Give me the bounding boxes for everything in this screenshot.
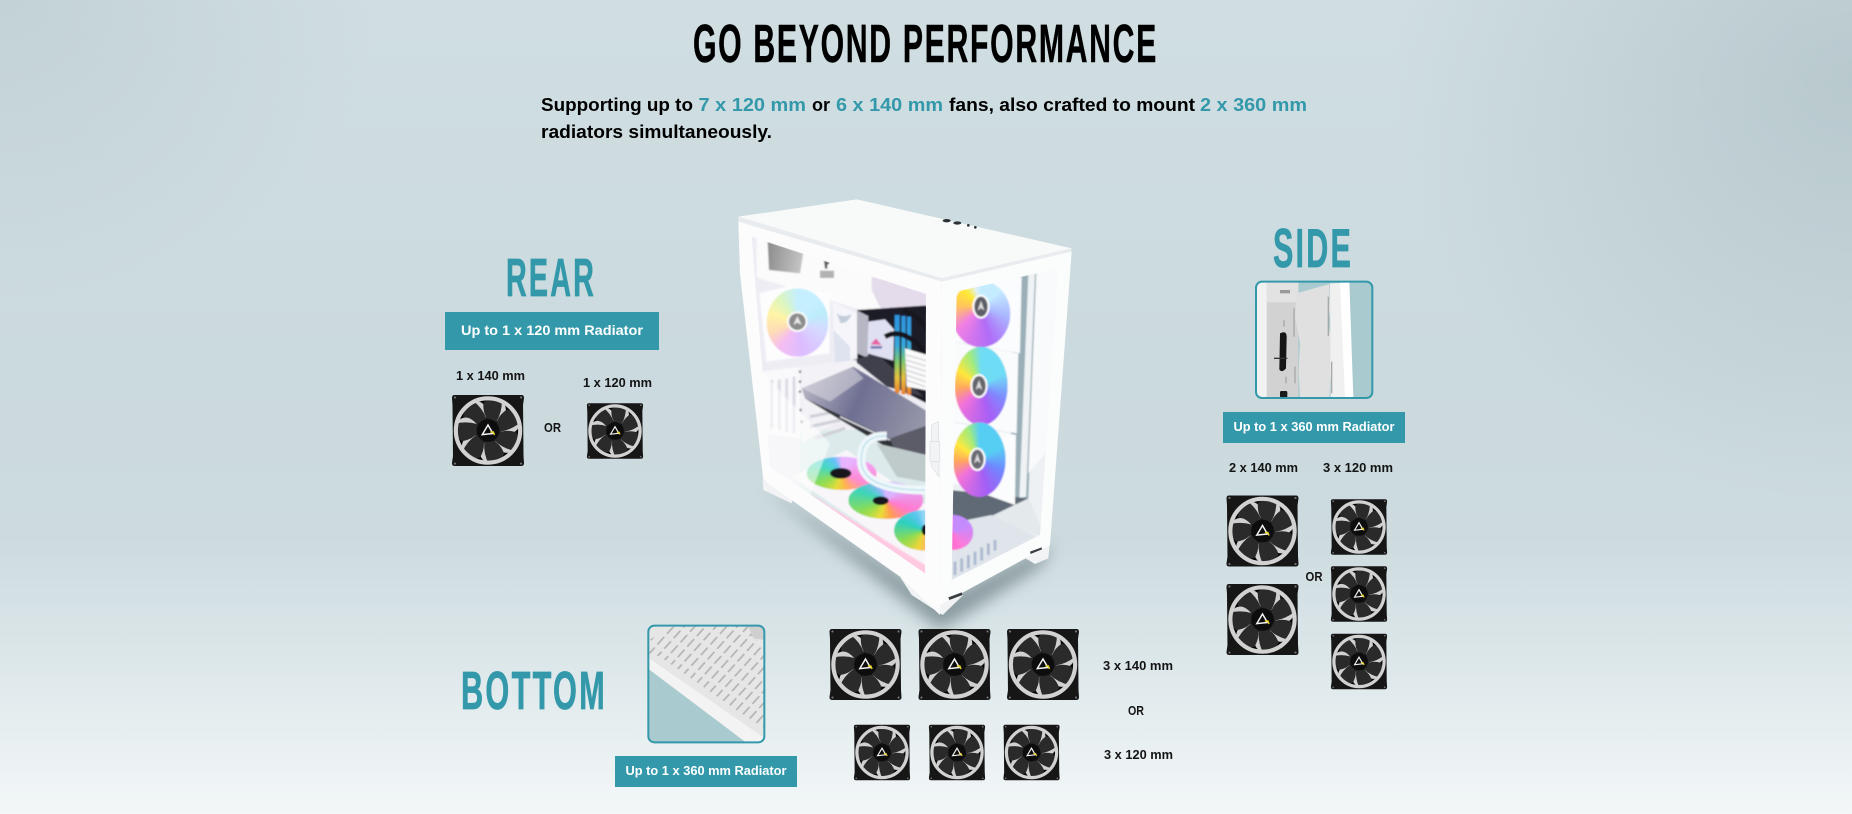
label: or: OR [1306,570,1322,584]
heading: side: SIDE [1273,217,1353,279]
intro text: 2 x 360 mm [1200,94,1307,115]
icon: 120 mm fan [926,723,985,782]
label: 3 x 120 mm: 3 x 120 mm [1323,461,1393,475]
photo: side panel closeup [1255,280,1375,400]
intro text [541,94,1307,142]
radiator badge: rear: Up to 1 x 120 mm Radiator [461,322,644,338]
icon: 120 mm fan [1328,632,1387,691]
radiator badge: bottom: Up to 1 x 360 mm Radiator [626,763,786,778]
radiator badge: rear [445,312,659,350]
bottom chamber hardware [877,444,926,482]
icon: 140 mm fan [449,392,524,469]
case feet [763,480,1050,615]
label: or: OR [1128,704,1144,718]
icon: 120 mm fan [851,723,910,782]
photo: bottom vent closeup [647,623,767,743]
icon: 140 mm fan [1004,626,1079,703]
centre pillar latch [930,422,939,477]
hard tube loop [861,436,933,490]
case shadow [763,487,1053,630]
panel: side [1223,217,1405,691]
cpu pump block [867,319,894,361]
case front frame [738,222,942,615]
label: 3 x 120 mm: 3 x 120 mm [1104,748,1173,762]
intro text: 7 x 120 mm [698,94,806,115]
icon: 140 mm fan [1223,581,1299,658]
radiator badge: bottom [615,756,797,787]
icon: 140 mm fan [1223,493,1299,569]
front glass interior [752,237,926,574]
intro text: Supporting up to [541,94,693,115]
label: or: OR [544,421,561,435]
side rgb fans [948,277,1022,505]
panel: pc case [738,199,1072,630]
panel: rear [445,249,659,469]
foot pads [948,547,1042,600]
icon: 120 mm fan [584,401,643,461]
top shroud [757,238,926,310]
power cable bundle [904,347,926,392]
radiator badge: side [1223,412,1405,443]
intro text: 6 x 140 mm [836,94,943,115]
intro text: fans, also crafted to mount [949,94,1195,115]
radiator badge: side: Up to 1 x 360 mm Radiator [1234,419,1394,434]
bottom rgb fans [800,450,926,574]
label: 1 x 120 mm: 1 x 120 mm [583,376,652,390]
case top panel [738,199,1072,283]
glass reflection [768,382,830,494]
panel: bottom [461,623,1173,787]
icon: 120 mm fan [1328,497,1387,557]
label: 3 x 140 mm: 3 x 140 mm [1103,659,1173,673]
icon: 120 mm fan [1001,723,1060,782]
heading: rear: REAR [506,249,596,308]
liquid cooling tubes [883,330,926,352]
bottom floor and vents [952,514,1036,580]
ram modules [895,315,911,395]
label: 1 x 140 mm: 1 x 140 mm [456,369,525,383]
icon: 120 mm fan [1328,564,1387,624]
graphics card [802,367,933,455]
icon: 140 mm fan [826,626,902,703]
intro text: or [812,94,830,115]
motherboard [857,305,933,407]
rear rgb fan [759,287,830,362]
heading: bottom: BOTTOM [461,661,607,721]
icon: 140 mm fan [915,626,991,703]
case side frame [940,252,1072,605]
label: 2 x 140 mm: 2 x 140 mm [1229,461,1298,475]
intro text: radiators simultaneously. [541,121,772,142]
rog panel [834,304,856,362]
rear radiator column [952,268,1058,535]
title: GO BEYOND PERFORMANCE [693,14,1158,74]
side glass interior [952,274,1046,580]
pci slot brackets [760,360,857,443]
